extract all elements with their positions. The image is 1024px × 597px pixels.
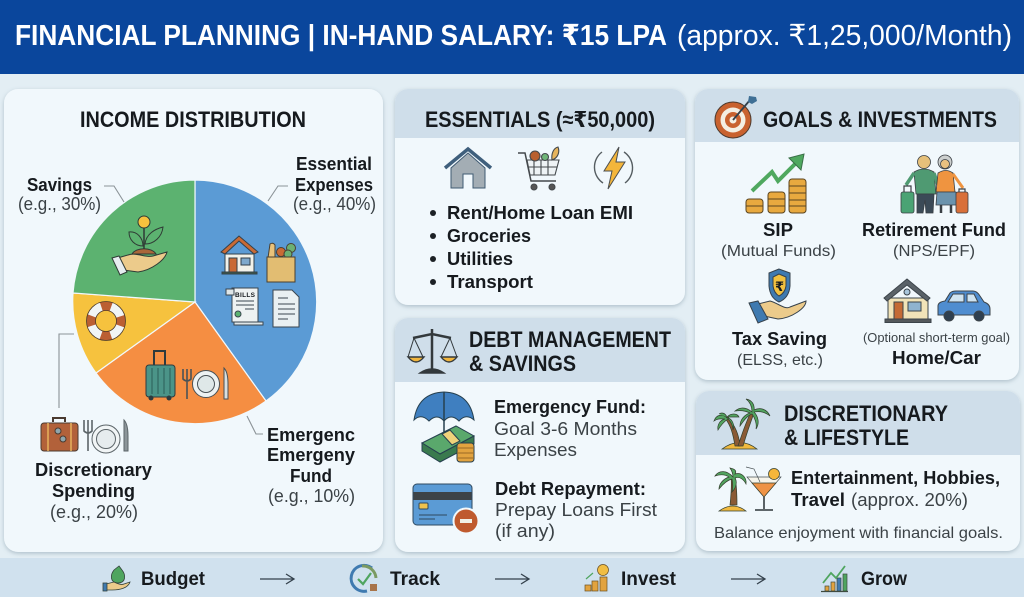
panel: essentials: [395, 89, 685, 305]
icon: budget: [103, 566, 130, 591]
icon: sip growth coins: [746, 154, 806, 213]
icon: house and car: [884, 279, 990, 322]
panel: debt management: [395, 318, 685, 552]
icon: briefcase: [41, 418, 78, 451]
title: FINANCIAL PLANNING | IN-HAND SALARY: ₹15 LPA: [15, 20, 667, 52]
panel: discretionary and lifestyle: [696, 391, 1020, 551]
list: essentials: [430, 203, 633, 292]
icon: sprout in hand: [112, 216, 167, 275]
label: budget: Budget: [141, 569, 206, 590]
label: savings: Savings: [27, 175, 92, 195]
text: entertainment: Travel: [791, 490, 845, 510]
text: sip: (Mutual Funds): [721, 243, 836, 260]
label: discretionary spending: Spending: [52, 481, 135, 501]
icon: house: [221, 236, 258, 274]
label: emergency fund: (e.g., 10%): [268, 486, 355, 506]
text: emergency fund: Emergency Fund:: [494, 397, 646, 417]
icon: grow: [821, 566, 848, 592]
text: retirement fund: Retirement Fund: [862, 220, 1006, 240]
heading: essentials: ESSENTIALS (≈₹50,000): [425, 107, 655, 132]
label: discretionary spending: Discretionary: [35, 460, 152, 480]
text: debt repayment: Debt Repayment:: [495, 479, 646, 499]
label: emergency fund: Fund: [290, 466, 332, 486]
icon: home: [445, 149, 491, 188]
icon: shopping cart: [518, 147, 559, 190]
leader: discretionary spending: [59, 334, 74, 408]
icon: palm island: [714, 399, 770, 449]
label: essential expenses: Expenses: [295, 175, 373, 195]
leader: emergency fund: [247, 416, 263, 434]
arrow: [731, 574, 765, 584]
icon: life ring: [86, 302, 126, 340]
text: home and car: Home/Car: [892, 348, 981, 368]
pie chart: [73, 180, 317, 424]
label: savings: (e.g., 30%): [18, 194, 101, 214]
label: emergency fund: Emergenc: [267, 425, 355, 445]
panel: goals and investments: [695, 89, 1019, 380]
text: debt repayment: (if any): [495, 521, 555, 541]
icon: plate and cutlery: [84, 420, 128, 453]
text: debt repayment: Prepay Loans First: [495, 500, 657, 520]
panel: income distribution: [4, 89, 383, 552]
icon: track: [351, 565, 377, 591]
header banner: [0, 0, 1024, 74]
icon: lightning bolt: [594, 147, 633, 189]
icon: document: [273, 290, 299, 327]
label: essential expenses: Essential: [296, 154, 372, 174]
icon: retirees with luggage: [901, 155, 968, 213]
label: track: Track: [390, 569, 440, 590]
list: essentials: Transport: [447, 272, 533, 292]
text: emergency fund: Goal 3-6 Months: [494, 419, 637, 439]
leader: essential expenses: [268, 186, 288, 201]
icon: plate and cutlery on pie: [183, 368, 228, 399]
text: home and car: (Optional short-term goal): [863, 330, 1010, 345]
text: tax saving: Tax Saving: [732, 329, 827, 349]
footer bar: budget track invest grow: [0, 558, 1024, 597]
text: retirement fund: (NPS/EPF): [893, 243, 975, 260]
label: discretionary spending: (e.g., 20%): [50, 502, 138, 522]
text: entertainment: (approx. 20%): [851, 490, 968, 510]
heading: goals and investments: GOALS & INVESTMENTS: [763, 107, 997, 132]
leader: savings: [104, 186, 124, 202]
icon: tax shield and hand: [749, 269, 806, 323]
icon: target: [715, 96, 757, 138]
heading: discretionary and lifestyle: & LIFESTYLE: [784, 425, 909, 450]
heading: income distribution: INCOME DISTRIBUTION: [80, 107, 306, 132]
list: essentials: Groceries: [447, 226, 531, 246]
icon: grocery bag: [267, 243, 296, 282]
label: essential expenses: (e.g., 40%): [293, 194, 376, 214]
icon: bills: BILLS: [235, 292, 256, 299]
icon: umbrella and cash: [414, 392, 474, 462]
arrow: [260, 574, 294, 584]
text: emergency fund: Expenses: [494, 440, 577, 460]
heading: discretionary and lifestyle: DISCRETIONARY: [784, 401, 948, 426]
list: essentials: Rent/Home Loan EMI: [447, 203, 633, 223]
arrow: [495, 574, 529, 584]
label: grow: Grow: [861, 569, 907, 590]
icon: invest: [585, 564, 608, 591]
icon: credit card with minus: [413, 484, 478, 534]
label: emergency fund: Emergeny: [267, 445, 355, 465]
text: tax saving: (ELSS, etc.): [737, 352, 823, 369]
list: essentials: Utilities: [447, 249, 513, 269]
text: balance note: Balance enjoyment with financial goals.: [714, 525, 1003, 542]
heading: debt management: & SAVINGS: [469, 351, 576, 376]
icon: trolley suitcase: [146, 351, 175, 400]
heading: debt management: DEBT MANAGEMENT: [469, 327, 671, 352]
title: (approx. ₹1,25,000/Month): [677, 20, 1012, 52]
icon: palm and cocktail: [715, 467, 781, 511]
label: invest: Invest: [621, 569, 677, 590]
icon: bills: [226, 288, 263, 325]
icon: tax shield and hand: ₹: [775, 279, 784, 294]
icon: scales: [408, 329, 457, 373]
text: sip: SIP: [763, 220, 793, 240]
text: entertainment: Entertainment, Hobbies,: [791, 468, 1000, 488]
